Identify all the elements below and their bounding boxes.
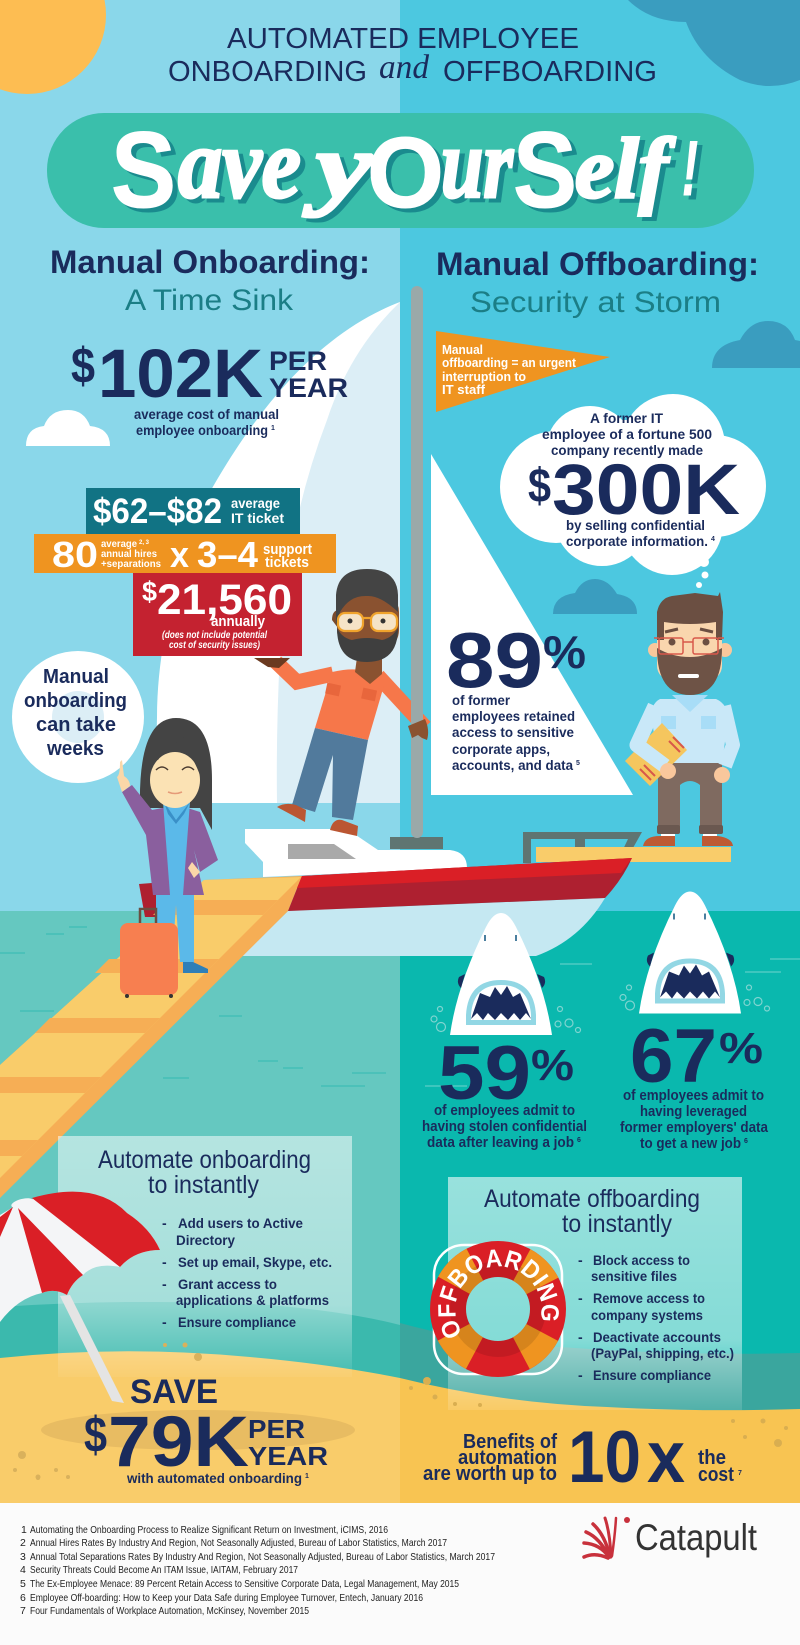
panel: automate onboarding: Grant access to — [178, 1276, 277, 1292]
panel: automate offboarding: - — [578, 1290, 583, 1306]
stat: 102K per year: $ — [71, 338, 95, 394]
teal sign: $62–$82 — [93, 492, 222, 531]
benefits: 10x the cost: cost — [698, 1464, 734, 1486]
banner pill: Save yOurSelf: ur — [441, 108, 514, 219]
water ripples — [0, 927, 800, 1086]
orange sign: +separations — [101, 559, 161, 570]
shark 2 — [620, 892, 770, 1014]
sand specks left — [13, 1342, 202, 1480]
stat: 67%: % — [719, 1024, 763, 1073]
stat: 89%: % — [543, 626, 586, 678]
boat: cabin window — [288, 844, 356, 859]
save 79K per year: SAVE — [130, 1373, 218, 1411]
thought cloud with $300K — [500, 394, 766, 588]
footnotes: Employee Off-boarding: How to Keep your Data Safe during Employee Turnover, Entech, January 2016 — [30, 1592, 423, 1604]
stat: 67%: 6 — [744, 1138, 748, 1145]
footnotes: Annual Hires Rates By Industry And Region, Not Seasonally Adjusted, Bureau of Labor Statistics, March 2017 — [30, 1537, 447, 1549]
orange sign: tickets — [265, 555, 309, 571]
panel: automate onboarding: - — [162, 1314, 167, 1330]
orange sign: average — [101, 539, 137, 550]
bearded man with clipboard — [625, 592, 733, 846]
stat: 89%: accounts, and data — [452, 758, 573, 773]
stat: 67%: of employees admit to — [623, 1088, 764, 1104]
benefits: 10x the cost: x — [647, 1417, 685, 1498]
title: AUTOMATED EMPLOYEE — [227, 23, 579, 55]
banner pill: Save yOurSelf: ave — [178, 108, 301, 219]
heading: manual offboarding: Security at Storm — [470, 286, 721, 319]
heading: manual onboarding: A Time Sink — [125, 284, 294, 317]
banner pill: Save yOurSelf: O — [367, 117, 444, 229]
panel: automate offboarding: Automate offboarding — [484, 1185, 700, 1213]
dock: wooden pier — [0, 876, 302, 1198]
footnotes: Four Fundamentals of Workplace Automation, McKinsey, November 2015 — [30, 1605, 309, 1617]
title: ONBOARDING — [168, 56, 367, 88]
boat: cabin — [245, 829, 467, 877]
stat: 59%: of employees admit to — [434, 1103, 575, 1119]
save 79K per year: 1 — [305, 1473, 309, 1480]
benefits: 10x the cost: are worth up to — [423, 1463, 557, 1485]
panel: automate offboarding: company systems — [591, 1307, 703, 1323]
footnotes: Security Threats Could Become An ITAM Issue, IAITAM, February 2017 — [30, 1564, 298, 1576]
save 79K per year: $ — [84, 1407, 107, 1463]
benefits: 10x the cost: 7 — [738, 1470, 742, 1477]
save 79K per year: 79K — [108, 1403, 249, 1482]
thought cloud with $300K: by selling confidential — [566, 518, 705, 533]
footnotes: 6 — [20, 1592, 26, 1604]
teal sign: IT ticket — [231, 510, 284, 526]
stat: 89%: of former — [452, 693, 511, 708]
footnotes: 3 — [20, 1551, 26, 1563]
panel: automate offboarding: Deactivate accounts — [593, 1329, 721, 1345]
panel: automate onboarding: - — [162, 1254, 167, 1270]
stat: 59%: 6 — [577, 1137, 581, 1144]
speech bubble: manual onboarding can take weeks: can take — [36, 714, 116, 736]
man with orange shirt — [254, 569, 425, 836]
pennant flag: interruption to — [442, 369, 526, 384]
sand left — [0, 1351, 400, 1503]
stat: 102K per year: 102K — [98, 335, 263, 412]
pennant flag — [436, 331, 610, 412]
stat: 89%: corporate apps, — [452, 742, 550, 757]
save 79K per year — [84, 1373, 328, 1486]
white cloud left — [26, 410, 110, 446]
speech bubble: manual onboarding can take weeks — [12, 651, 144, 783]
stat: 89%: access to sensitive — [452, 725, 574, 740]
footnotes: The Ex-Employee Menace: 89 Percent Retain Access to Sensitive Corporate Data, Legal Management, May 2015 — [30, 1578, 459, 1590]
panel: automate onboarding: Set up email, Skype, etc. — [178, 1254, 332, 1270]
stat: 102K per year: PER — [269, 346, 327, 376]
footnotes: Automating the Onboarding Process to Realize Significant Return on Investment, iCIMS, 2016 — [30, 1524, 388, 1536]
teal sign — [86, 488, 300, 534]
panel: automate offboarding: Remove access to — [593, 1290, 705, 1306]
sign stack — [34, 488, 336, 656]
panel: automate offboarding: - — [578, 1252, 583, 1268]
banner pill: Save yOurSelf: y — [302, 115, 374, 217]
panel: automate offboarding — [448, 1177, 742, 1410]
speech bubble: manual onboarding can take weeks: Manual — [43, 666, 109, 688]
speech bubble: manual onboarding can take weeks: onboarding — [24, 690, 127, 712]
stat: 67% — [620, 1014, 769, 1152]
panel: automate offboarding: Ensure compliance — [593, 1367, 711, 1383]
banner pill: Save yOurSelf: S — [513, 109, 577, 230]
panel: automate onboarding: applications & platforms — [176, 1292, 329, 1308]
stat: 102K per year: employee onboarding — [136, 423, 268, 438]
panel: automate offboarding: sensitive files — [591, 1268, 677, 1284]
stat: 102K per year: 1 — [271, 425, 275, 432]
teal sign: average — [231, 495, 280, 511]
orange sign — [34, 534, 336, 575]
stat: 89% — [446, 616, 586, 773]
orange sign: 80 — [52, 534, 98, 575]
sail: main white and pale — [157, 302, 400, 803]
orange sign: 2, 3 — [139, 540, 150, 546]
banner pill: Save yOurSelf — [47, 108, 754, 230]
pennant flag: IT staff — [442, 382, 486, 397]
footnotes: 2 — [20, 1537, 26, 1549]
panel: automate onboarding: Add users to Active — [178, 1215, 303, 1231]
save 79K per year: YEAR — [248, 1441, 328, 1471]
Catapult logo — [584, 1517, 758, 1558]
beach water band right — [400, 1323, 800, 1415]
beach shadow — [41, 1410, 355, 1450]
stat: 67%: 67 — [630, 1014, 717, 1099]
panel: automate onboarding: Automate onboarding — [98, 1146, 311, 1174]
sand right — [400, 1378, 800, 1503]
footer background — [0, 1503, 800, 1645]
pennant flag: Manual — [442, 342, 483, 357]
thought cloud with $300K: employee of a fortune 500 — [542, 427, 712, 442]
thought cloud with $300K: 300K — [552, 451, 740, 530]
save 79K per year: with automated onboarding — [126, 1471, 302, 1486]
dark cloud top right — [628, 0, 800, 86]
life ring: offboarding — [430, 1241, 566, 1377]
sail: small right — [431, 454, 633, 795]
thought cloud with $300K: $ — [528, 460, 551, 513]
title — [168, 23, 657, 88]
boat: red hull — [288, 858, 632, 911]
panel: automate offboarding: - — [578, 1329, 583, 1345]
thought cloud with $300K: 4 — [711, 536, 715, 543]
orange sign: 3–4 — [197, 534, 258, 575]
man's hand on mast — [408, 719, 428, 740]
thought cloud with $300K: corporate information. — [566, 534, 708, 549]
heading: manual offboarding: Manual Offboarding: — [436, 246, 759, 282]
stat: 67%: having leveraged — [640, 1104, 747, 1120]
panel: automate onboarding: to instantly — [148, 1171, 259, 1199]
banner pill: Save yOurSelf: elf — [575, 120, 676, 216]
benefits: 10x the cost: Benefits of — [463, 1431, 557, 1453]
red sign: $ — [142, 576, 157, 607]
panel: automate onboarding: - — [162, 1215, 167, 1231]
banner pill: Save yOurSelf: ! — [682, 124, 698, 212]
red sign — [133, 573, 302, 656]
boat: hidden hull below waterline — [242, 898, 605, 956]
boat: mast base — [390, 837, 443, 849]
stat: 102K per year: average cost of manual — [134, 407, 279, 422]
sand specks right — [409, 1377, 788, 1447]
title: and — [379, 49, 430, 86]
title: OFFBOARDING — [443, 56, 657, 88]
boat: left hull stub — [139, 882, 165, 917]
panel: automate offboarding: Block access to — [593, 1252, 690, 1268]
footnotes: 1 — [21, 1524, 27, 1536]
benefits: 10x the cost: 10 — [568, 1417, 641, 1498]
dark cloud middle — [553, 579, 637, 614]
red sign: annually — [211, 614, 265, 630]
stat: 59%: 59 — [438, 1031, 531, 1116]
stat: 59%: having stolen confidential — [422, 1119, 587, 1135]
dark cloud right — [712, 321, 800, 368]
beach umbrella — [0, 1192, 160, 1403]
mast — [411, 286, 423, 838]
Catapult logo: Catapult — [635, 1517, 758, 1558]
benefits: 10x the cost: the — [698, 1447, 726, 1469]
pennant flag: offboarding = an urgent — [442, 355, 577, 370]
shark 1 — [431, 913, 580, 1035]
stat: 89%: 89 — [446, 616, 543, 704]
heading: manual onboarding — [50, 244, 370, 317]
panel: automate onboarding — [58, 1136, 352, 1377]
panel: automate onboarding: - — [162, 1276, 167, 1292]
benefits: 10x the cost: automation — [458, 1447, 557, 1469]
woman with suitcase — [117, 718, 218, 998]
panel: automate onboarding: Ensure compliance — [178, 1314, 296, 1330]
stat: 102K per year: YEAR — [269, 373, 348, 403]
thought cloud with $300K: company recently made — [551, 443, 703, 458]
boat: right railing — [523, 832, 642, 863]
panel: automate onboarding: Directory — [176, 1232, 235, 1248]
stat: 67%: to get a new job — [640, 1136, 741, 1152]
stat: 89%: employees retained — [452, 709, 575, 724]
sky background left — [0, 0, 400, 911]
banner pill: Save yOurSelf: S — [111, 109, 176, 230]
benefits: 10x the cost — [423, 1417, 742, 1498]
stat: 102K per year — [71, 335, 348, 438]
footnotes: 5 — [20, 1578, 26, 1590]
orange sign: support — [263, 542, 312, 558]
sun — [0, 0, 106, 94]
sky background right — [400, 0, 800, 911]
red sign: 21,560 — [157, 576, 292, 624]
panel: automate offboarding: (PayPal, shipping, etc.) — [591, 1345, 734, 1361]
life ring: offboarding: OFFBOARDING — [438, 1250, 559, 1338]
water right — [400, 911, 800, 1411]
thought cloud with $300K: A former IT — [590, 411, 664, 426]
stat: 59%: % — [531, 1041, 574, 1090]
orange sign: annual hires — [101, 549, 157, 560]
orange sign: x — [170, 534, 189, 575]
footnotes: 7 — [20, 1605, 26, 1617]
stat: 67%: former employers' data — [620, 1120, 769, 1136]
stat: 89%: 5 — [576, 760, 580, 767]
footnotes — [20, 1524, 495, 1617]
red sign: (does not include potential — [162, 630, 267, 641]
heading: manual offboarding — [436, 246, 759, 319]
speech bubble: manual onboarding can take weeks: weeks — [46, 738, 104, 760]
save 79K per year: PER — [248, 1414, 305, 1444]
heading: manual onboarding: Manual Onboarding: — [50, 244, 370, 280]
panel: automate offboarding: to instantly — [562, 1210, 672, 1238]
stat: 59%: data after leaving a job — [427, 1135, 574, 1151]
footnotes: 4 — [20, 1564, 26, 1576]
red sign: cost of security issues) — [169, 640, 261, 651]
water left — [0, 911, 400, 1381]
stat: 59% — [422, 1031, 587, 1151]
panel: automate offboarding: - — [578, 1367, 583, 1383]
right dock platform — [536, 847, 731, 862]
beach water band left — [0, 1302, 400, 1385]
footnotes: Annual Total Separations Rates By Industry And Region, Not Seasonally Adjusted, Bureau of Labor Statistics, March 2017 — [30, 1551, 495, 1563]
